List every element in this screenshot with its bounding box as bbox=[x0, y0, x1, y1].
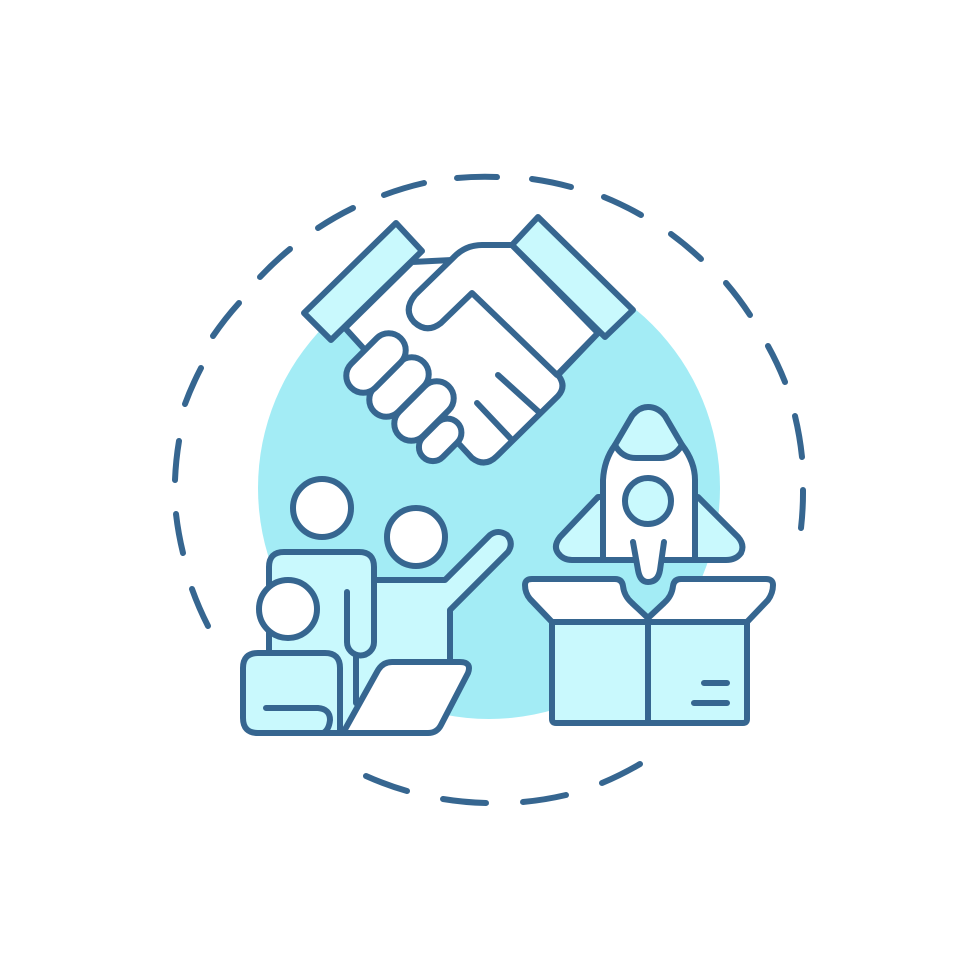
person C head bbox=[259, 580, 317, 638]
person C body bbox=[243, 653, 343, 733]
box left flap bbox=[525, 579, 648, 622]
dashed ring bbox=[175, 177, 803, 803]
box right flap bbox=[648, 579, 773, 622]
person A lower edge line bbox=[353, 655, 359, 703]
icon: team at laptop bbox=[243, 479, 511, 733]
laptop bbox=[343, 662, 469, 733]
left hand fingers bbox=[339, 326, 467, 467]
person B body with raised arm bbox=[374, 532, 511, 664]
box centre seam bbox=[645, 622, 651, 723]
icon: rocket launching from box bbox=[525, 407, 773, 723]
person A head bbox=[293, 479, 351, 537]
person C arm line bbox=[266, 708, 330, 733]
box front bbox=[552, 622, 747, 723]
icon: handshake bbox=[304, 217, 633, 467]
box label lines bbox=[694, 683, 727, 703]
finger separator lines bbox=[477, 375, 540, 440]
rocket nose bbox=[615, 407, 682, 458]
background circle bbox=[258, 257, 720, 719]
right cuff bbox=[512, 217, 633, 337]
rocket fins bbox=[556, 497, 742, 560]
right hand with thumb bbox=[409, 245, 598, 375]
left cuff bbox=[304, 223, 422, 340]
rocket body bbox=[603, 430, 695, 560]
rocket window bbox=[625, 478, 671, 524]
rocket flame bbox=[633, 542, 664, 582]
team body base fill bbox=[269, 560, 450, 733]
left hand palm bbox=[345, 245, 598, 463]
person A body bbox=[269, 552, 374, 656]
person B head bbox=[387, 508, 445, 566]
